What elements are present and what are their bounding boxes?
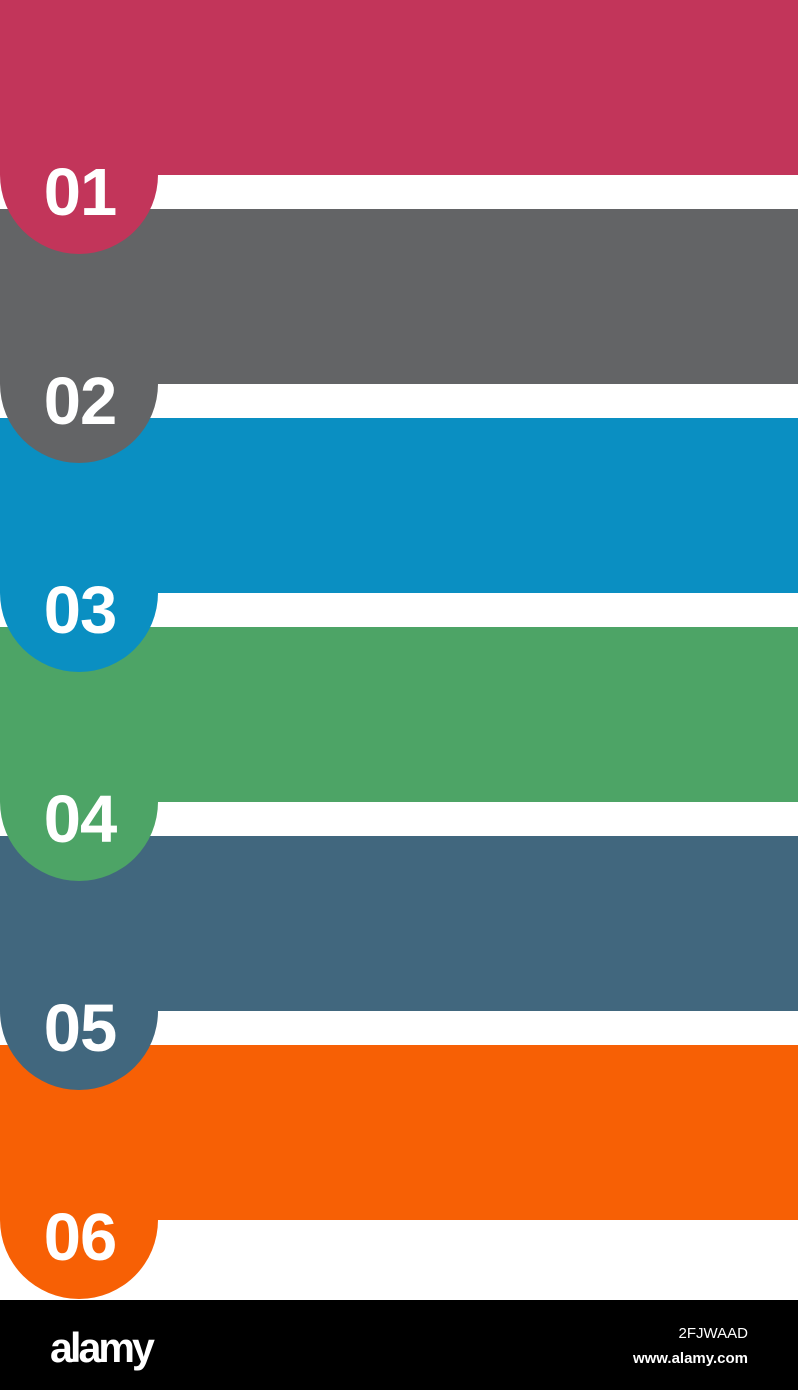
tab 05: 05 [44, 991, 116, 1066]
footer logo: alamy [50, 1324, 156, 1371]
panel: step 04 [0, 627, 798, 802]
footer bar: www.alamy.com [632, 1350, 748, 1367]
tab 02: 02 [44, 364, 116, 439]
panel: step 05 [0, 836, 798, 1011]
tab 01: 01 [44, 155, 116, 230]
panel: step 03 [0, 418, 798, 593]
footer id: 2FJWAAD [679, 1325, 748, 1342]
panel: step 02 [0, 209, 798, 384]
tab 06 [0, 1145, 158, 1299]
tab 01 [0, 100, 158, 254]
panel: step 06 [0, 1045, 798, 1220]
tab 06: 06 [44, 1200, 116, 1275]
footer bar [0, 1300, 798, 1390]
tab 04: 04 [44, 782, 117, 857]
panel: step 01 [0, 0, 798, 175]
tab 04 [0, 727, 158, 881]
tab 03: 03 [44, 573, 116, 648]
tab 02 [0, 309, 158, 463]
tab 03 [0, 518, 158, 672]
tab 05 [0, 936, 158, 1090]
